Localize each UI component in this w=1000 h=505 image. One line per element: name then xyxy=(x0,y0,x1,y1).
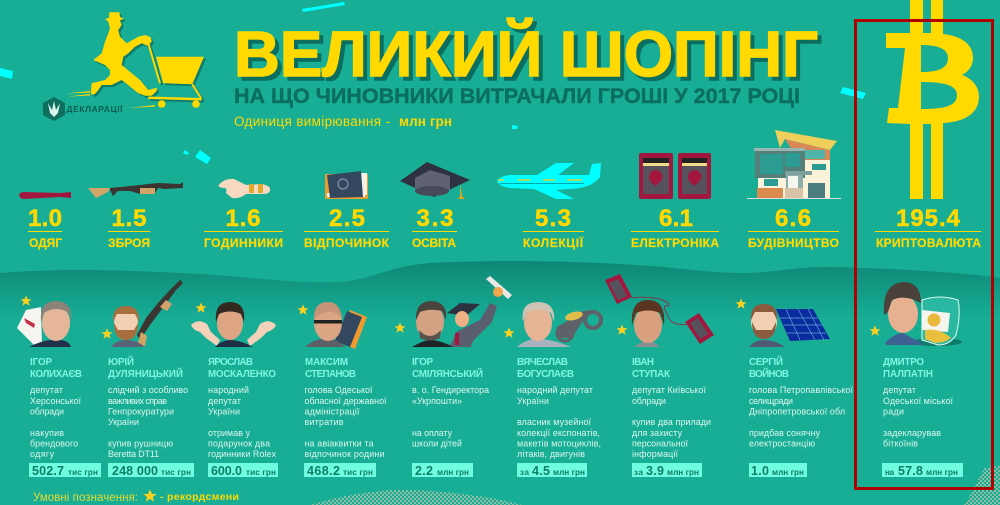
amount badge xyxy=(304,463,376,478)
person: Kolykhaiev: КОЛИХАЄВ xyxy=(30,369,82,380)
person: Stupak: облради xyxy=(632,396,666,406)
person: Moskalenko: отримав у xyxy=(208,428,251,438)
amount badge: млн грн xyxy=(926,468,958,477)
amount badge: 2.2 xyxy=(415,464,433,478)
title: ВЕЛИКИЙ ШОПІНГ xyxy=(234,17,818,90)
person: Kolykhaiev: накупив xyxy=(30,428,64,438)
icon: star xyxy=(504,328,514,338)
person: Kolykhaiev: ІГОР xyxy=(30,357,52,368)
person: Dulianytskyi: купив рушницю xyxy=(108,438,173,448)
person: Stupak: купив два прилади xyxy=(632,417,711,427)
person: Smilianskyi: ІГОР xyxy=(412,357,433,368)
person: Dulianytskyi: ДУЛЯНИЦЬКИЙ xyxy=(108,368,183,380)
logo: shopper with cart xyxy=(43,12,206,121)
category: education xyxy=(400,162,470,250)
icon: star xyxy=(870,326,880,336)
category: electronics: 6.1 xyxy=(659,205,693,232)
person: Stupak: СТУПАК xyxy=(632,369,670,380)
person: Stepanov: на авіаквитки та xyxy=(304,438,374,448)
person: Voinov: СЕРГІЙ xyxy=(749,356,783,368)
person: Bohuslaiev: України xyxy=(517,396,549,406)
person: Smilianskyi: «Укрпошти» xyxy=(412,396,462,406)
cartoon with rifle xyxy=(111,280,183,347)
person: Kolykhaiev xyxy=(17,296,101,478)
portrait with devices xyxy=(605,274,714,347)
category: electronics: ЕЛЕКТРОНІКА xyxy=(631,236,719,250)
person: Dulianytskyi: Генпрокуратури xyxy=(108,406,174,416)
person: Voinov: голова Петропавлівської xyxy=(749,385,854,395)
person: Dulianytskyi: ЮРІЙ xyxy=(108,356,134,368)
icon: airplane xyxy=(497,163,601,199)
portrait with cards xyxy=(17,301,71,347)
amount badge: тис грн xyxy=(246,468,276,477)
category: collections xyxy=(497,163,601,250)
person: Bohuslaiev: БОГУСЛАЄВ xyxy=(517,369,574,380)
category: construction: БУДІВНИЦТВО xyxy=(748,236,839,250)
amount badge: 3.9 xyxy=(646,464,664,478)
amount badge: на xyxy=(885,468,894,477)
amount badge: 4.5 xyxy=(532,464,550,478)
category: construction: 6.6 xyxy=(775,205,811,232)
person: Bohuslaiev: народний депутат xyxy=(517,385,593,395)
amount badge: за xyxy=(520,468,529,477)
person: Smilianskyi xyxy=(394,276,512,478)
person: Bohuslaiev: колекції експонатів, xyxy=(517,428,600,438)
person: Palpatin: депутат xyxy=(883,385,916,395)
person: Stepanov: витратив xyxy=(304,417,344,427)
cart xyxy=(66,43,204,108)
amount badge xyxy=(882,463,963,478)
person: Stepanov: голова Одеської xyxy=(304,385,373,395)
icon: bitcoin xyxy=(886,0,979,199)
category: clothes: 1.0 xyxy=(28,205,62,232)
category: cryptocurrency xyxy=(875,0,981,250)
person: Stupak: ІВАН xyxy=(632,357,654,368)
amount badge: 468.2 xyxy=(307,464,340,478)
amount badge: 502.7 xyxy=(32,464,64,478)
person: Dulianytskyi: Beretta DT11 xyxy=(108,449,159,459)
category: vacation: 2.5 xyxy=(329,205,365,232)
person: Stepanov xyxy=(298,302,387,478)
person: Stepanov: СТЕПАНОВ xyxy=(305,369,356,380)
category: cryptocurrency: КРИПТОВАЛЮТА xyxy=(876,236,981,250)
amount badge xyxy=(517,463,587,478)
person: Dulianytskyi: важливих справ xyxy=(108,396,167,406)
title: ВЕЛИКИЙ ШОПІНГ xyxy=(238,21,822,94)
icon: star xyxy=(394,322,406,333)
icon: bat xyxy=(19,192,71,199)
portrait with hands xyxy=(191,302,276,347)
units note: млн грн xyxy=(399,114,452,129)
amount badge: 600.0 xyxy=(211,464,242,478)
portrait with coin jar xyxy=(884,282,962,346)
legend: - рекордсмени xyxy=(160,491,239,503)
icon: hand with watches xyxy=(218,179,270,198)
subtitle: НА ЩО ЧИНОВНИКИ ВИТРАЧАЛИ ГРОШІ У 2017 РОЦІ xyxy=(234,84,800,108)
person: Stepanov: обласної державної xyxy=(304,396,387,406)
person: Palpatin: Одеської міської xyxy=(883,396,954,406)
amount badge xyxy=(632,463,702,478)
person: Smilianskyi: в. о. Гендиректора xyxy=(412,385,489,395)
icon: graduation cap xyxy=(400,162,470,199)
person: Stepanov: адміністрації xyxy=(304,406,360,416)
amount badge: 1.0 xyxy=(751,464,769,478)
person: Bohuslaiev: літаків, двигунів xyxy=(517,449,585,459)
person: Stupak: персональної xyxy=(632,438,689,448)
icon: house xyxy=(747,130,841,199)
category: weapons: ЗБРОЯ xyxy=(108,236,150,250)
icon: star xyxy=(196,302,206,313)
declarations emblem: ДЕКЛАРАЦІЇ xyxy=(66,104,123,114)
amount badge: млн грн xyxy=(667,468,699,477)
category: education: ОСВІТА xyxy=(412,236,456,250)
person: Moskalenko: подарунок два xyxy=(208,438,270,448)
person: Dulianytskyi xyxy=(102,280,194,478)
legend: Умовні позначення: xyxy=(33,492,138,504)
category: weapons xyxy=(88,182,183,250)
person: Dulianytskyi: слідчий з особливо xyxy=(108,385,188,395)
icon: security devices xyxy=(639,153,711,199)
amount badge xyxy=(108,463,194,478)
amount badge: за xyxy=(634,468,643,477)
person: Bohuslaiev: ВЯЧЕСЛАВ xyxy=(517,357,568,368)
person: Stepanov: МАКСИМ xyxy=(305,357,348,368)
person: Smilianskyi: СМІЛЯНСЬКИЙ xyxy=(412,368,483,380)
cartoon with solar panel xyxy=(749,304,830,347)
amount badge: млн грн xyxy=(772,468,804,477)
portrait with passport xyxy=(305,302,367,349)
person: Smilianskyi: школи дітей xyxy=(412,438,462,448)
person: Voinov: придбав сонячну xyxy=(749,428,821,438)
person: Palpatin: ПАЛПАТІН xyxy=(883,369,933,380)
amount badge: 248 000 xyxy=(112,464,158,478)
units note: Одиниця вимірювання - xyxy=(234,114,390,129)
person: Voinov: ВОЙНОВ xyxy=(749,368,789,380)
icon: star xyxy=(616,324,628,335)
category: education: 3.3 xyxy=(416,205,454,232)
man silhouette xyxy=(91,12,157,96)
amount badge: млн грн xyxy=(553,468,585,477)
person: Palpatin xyxy=(870,282,963,478)
amount badge xyxy=(208,463,278,478)
person: Bohuslaiev: власник музейної xyxy=(517,417,592,427)
portrait with graduate xyxy=(412,276,512,347)
amount badge: 57.8 xyxy=(898,464,923,478)
category: watches xyxy=(204,179,283,250)
person: Kolykhaiev: депутат xyxy=(30,385,63,395)
person: Voinov: Дніпропетровської обл xyxy=(749,406,845,416)
person: Dulianytskyi: України xyxy=(108,417,139,427)
category: collections: КОЛЕКЦІЇ xyxy=(523,235,584,250)
person: Voinov xyxy=(736,298,854,478)
person: Stupak xyxy=(605,274,714,478)
amount badge: тис грн xyxy=(343,468,373,477)
category: clothes: ОДЯГ xyxy=(29,236,62,250)
person: Smilianskyi: на оплату xyxy=(412,428,453,438)
person: Kolykhaiev: брендового xyxy=(30,438,78,448)
category: cryptocurrency: 195.4 xyxy=(896,205,961,232)
person: Kolykhaiev: Херсонської xyxy=(30,396,82,406)
category: clothes xyxy=(19,192,71,250)
category: vacation: ВІДПОЧИНОК xyxy=(304,236,390,250)
person: Moskalenko xyxy=(191,302,278,478)
icon: passport and tickets xyxy=(325,171,368,199)
highlight frame: crypto column xyxy=(856,20,992,488)
person: Palpatin: задекларував xyxy=(883,428,941,438)
person: Palpatin: біткоїнів xyxy=(883,438,918,448)
person: Stepanov: відпочинок родини xyxy=(304,449,385,459)
category: collections: 5.3 xyxy=(535,205,571,232)
amount badge xyxy=(749,463,807,478)
amount badge: тис грн xyxy=(68,468,98,477)
person: Moskalenko: народний xyxy=(208,385,249,395)
category: electronics xyxy=(631,153,719,250)
category: weapons: 1.5 xyxy=(112,205,146,232)
category: vacation xyxy=(304,171,390,250)
person: Stupak: для захисту xyxy=(632,428,683,438)
category: watches: ГОДИННИКИ xyxy=(204,236,283,250)
category: watches: 1.6 xyxy=(226,205,260,232)
amount badge: млн грн xyxy=(437,468,469,477)
person: Moskalenko: депутат xyxy=(208,396,241,406)
amount badge xyxy=(412,463,473,478)
person: Voinov: електростанцію xyxy=(749,438,815,448)
person: Stupak: депутат Київської xyxy=(632,385,707,395)
category: construction xyxy=(747,130,841,250)
legend xyxy=(33,489,239,504)
portrait with motorcycle xyxy=(517,302,601,347)
person: Kolykhaiev: одягу xyxy=(30,449,55,459)
icon: rifle xyxy=(88,182,183,198)
person: Stupak: інформації xyxy=(632,449,679,459)
amount badge xyxy=(29,463,101,478)
person: Bohuslaiev xyxy=(504,302,601,478)
icon: star xyxy=(20,296,32,306)
person: Moskalenko: ЯРОСЛАВ xyxy=(208,357,253,368)
person: Moskalenko: МОСКАЛЕНКО xyxy=(208,369,276,380)
person: Moskalenko: годинники Rolex xyxy=(208,449,277,459)
icon: star xyxy=(298,304,308,315)
person: Voinov: селищради xyxy=(749,396,793,406)
person: Moskalenko: України xyxy=(208,406,240,416)
amount badge: тис грн xyxy=(161,468,191,477)
person: Palpatin: ради xyxy=(883,406,904,416)
icon: star xyxy=(102,328,112,339)
declarations emblem xyxy=(43,97,123,121)
person: Palpatin: ДМИТРО xyxy=(883,357,924,368)
icon: star xyxy=(736,298,746,309)
person: Kolykhaiev: облради xyxy=(30,406,64,416)
person: Bohuslaiev: макетів мотоциклів, xyxy=(517,438,601,448)
